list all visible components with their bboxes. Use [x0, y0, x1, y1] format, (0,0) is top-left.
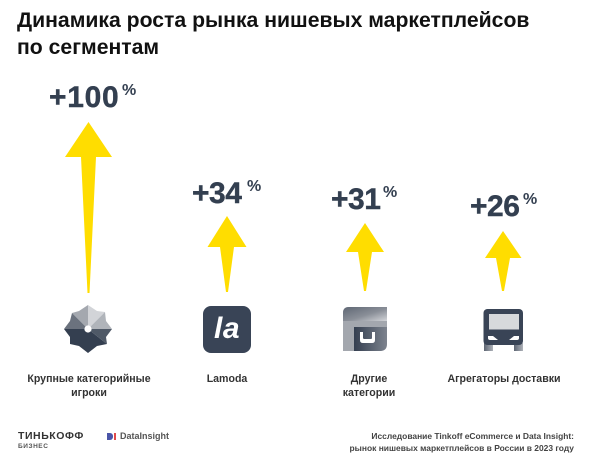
- label: large category players: [27, 373, 151, 399]
- value: +26%: +26: [470, 190, 519, 223]
- logo: Tinkoff Business: [18, 430, 84, 450]
- label: other categories: [343, 373, 395, 399]
- title: по сегментам: [17, 36, 159, 58]
- label: Lamoda: Lamoda: [207, 373, 247, 385]
- value: +34%: %: [247, 178, 261, 195]
- value: +34%: +34: [192, 177, 241, 210]
- arrow: other categories: [346, 223, 384, 291]
- logo: Data Insight: DataInsight: [120, 431, 169, 441]
- arrow: delivery aggregators: [485, 231, 522, 291]
- icon: umbrella: [64, 305, 112, 353]
- icon: bus: [484, 309, 523, 351]
- title: Динамика роста рынка нишевых маркетплейсов: [17, 9, 529, 32]
- label: other categories: Другие: [351, 373, 387, 385]
- logo: Tinkoff Business: БИЗНЕС: [18, 443, 48, 450]
- icon: Lamoda logo: [203, 306, 251, 353]
- label: other categories: категории: [343, 387, 395, 399]
- value: +31%: %: [383, 184, 397, 201]
- icon: other categories box: [343, 307, 387, 351]
- arrow: large category players: [65, 122, 112, 293]
- value: +100%: +100: [49, 81, 119, 114]
- label: large category players: Крупные категорийные: [27, 373, 151, 385]
- label: delivery aggregators: Агрегаторы доставки: [447, 373, 561, 385]
- source note: [350, 431, 574, 453]
- arrow: Lamoda: [208, 216, 246, 292]
- value: +26%: %: [523, 191, 537, 208]
- source note: рынок нишевых маркетплейсов в России в 2023 году: [350, 443, 574, 453]
- value: +31%: +31: [331, 183, 380, 216]
- icon: Lamoda logo: la: [214, 312, 240, 345]
- value: +100%: %: [122, 82, 136, 99]
- label: large category players: игроки: [71, 387, 107, 399]
- title: [17, 9, 529, 58]
- logo: Tinkoff Business: ТИНЬКОФФ: [18, 430, 84, 442]
- source note: Исследование Tinkoff eCommerce и Data Insight:: [371, 431, 574, 441]
